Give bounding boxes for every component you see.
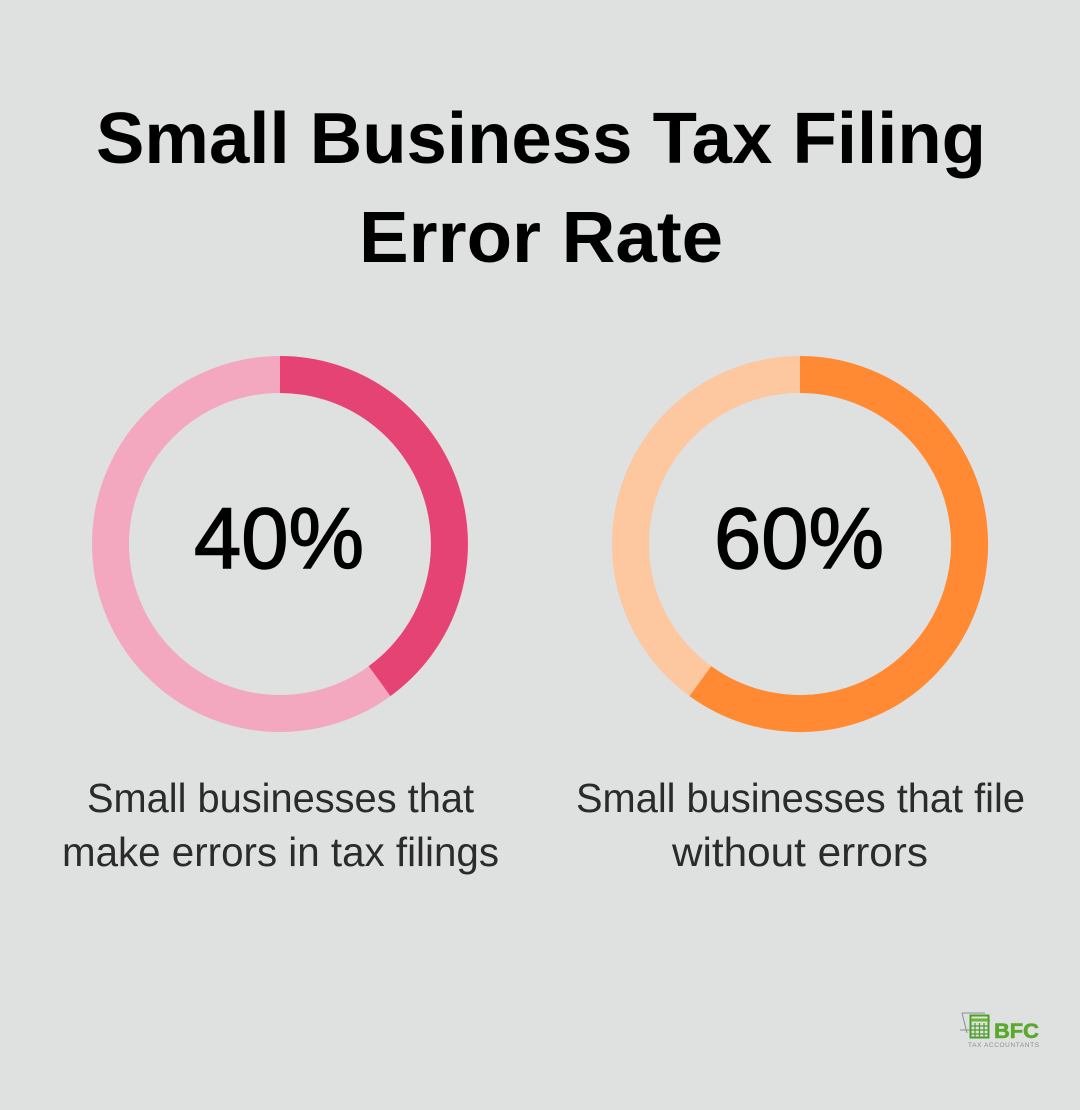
caption: errors: make errors in tax filings [62,829,499,875]
donut chart: 40% [110,374,450,714]
title [96,99,986,278]
caption: errors [62,775,499,875]
caption: no errors [576,775,1025,875]
logo tagline: TAX ACCOUNTANTS [968,1042,1040,1049]
icon: calculator [960,1013,990,1038]
stat: 60%: 60% [714,491,884,587]
stat: 40%: 40% [194,491,364,587]
caption: no errors: Small businesses that file [576,775,1025,821]
logo wordmark: BFC [994,1020,1039,1043]
title: Error Rate [359,198,723,278]
logo: BFC Tax Accountants [960,1013,1040,1049]
caption: errors: Small businesses that [87,775,475,821]
caption: no errors: without errors [671,829,928,875]
title: Small Business Tax Filing [96,99,986,179]
donut chart: 60% [630,374,970,714]
